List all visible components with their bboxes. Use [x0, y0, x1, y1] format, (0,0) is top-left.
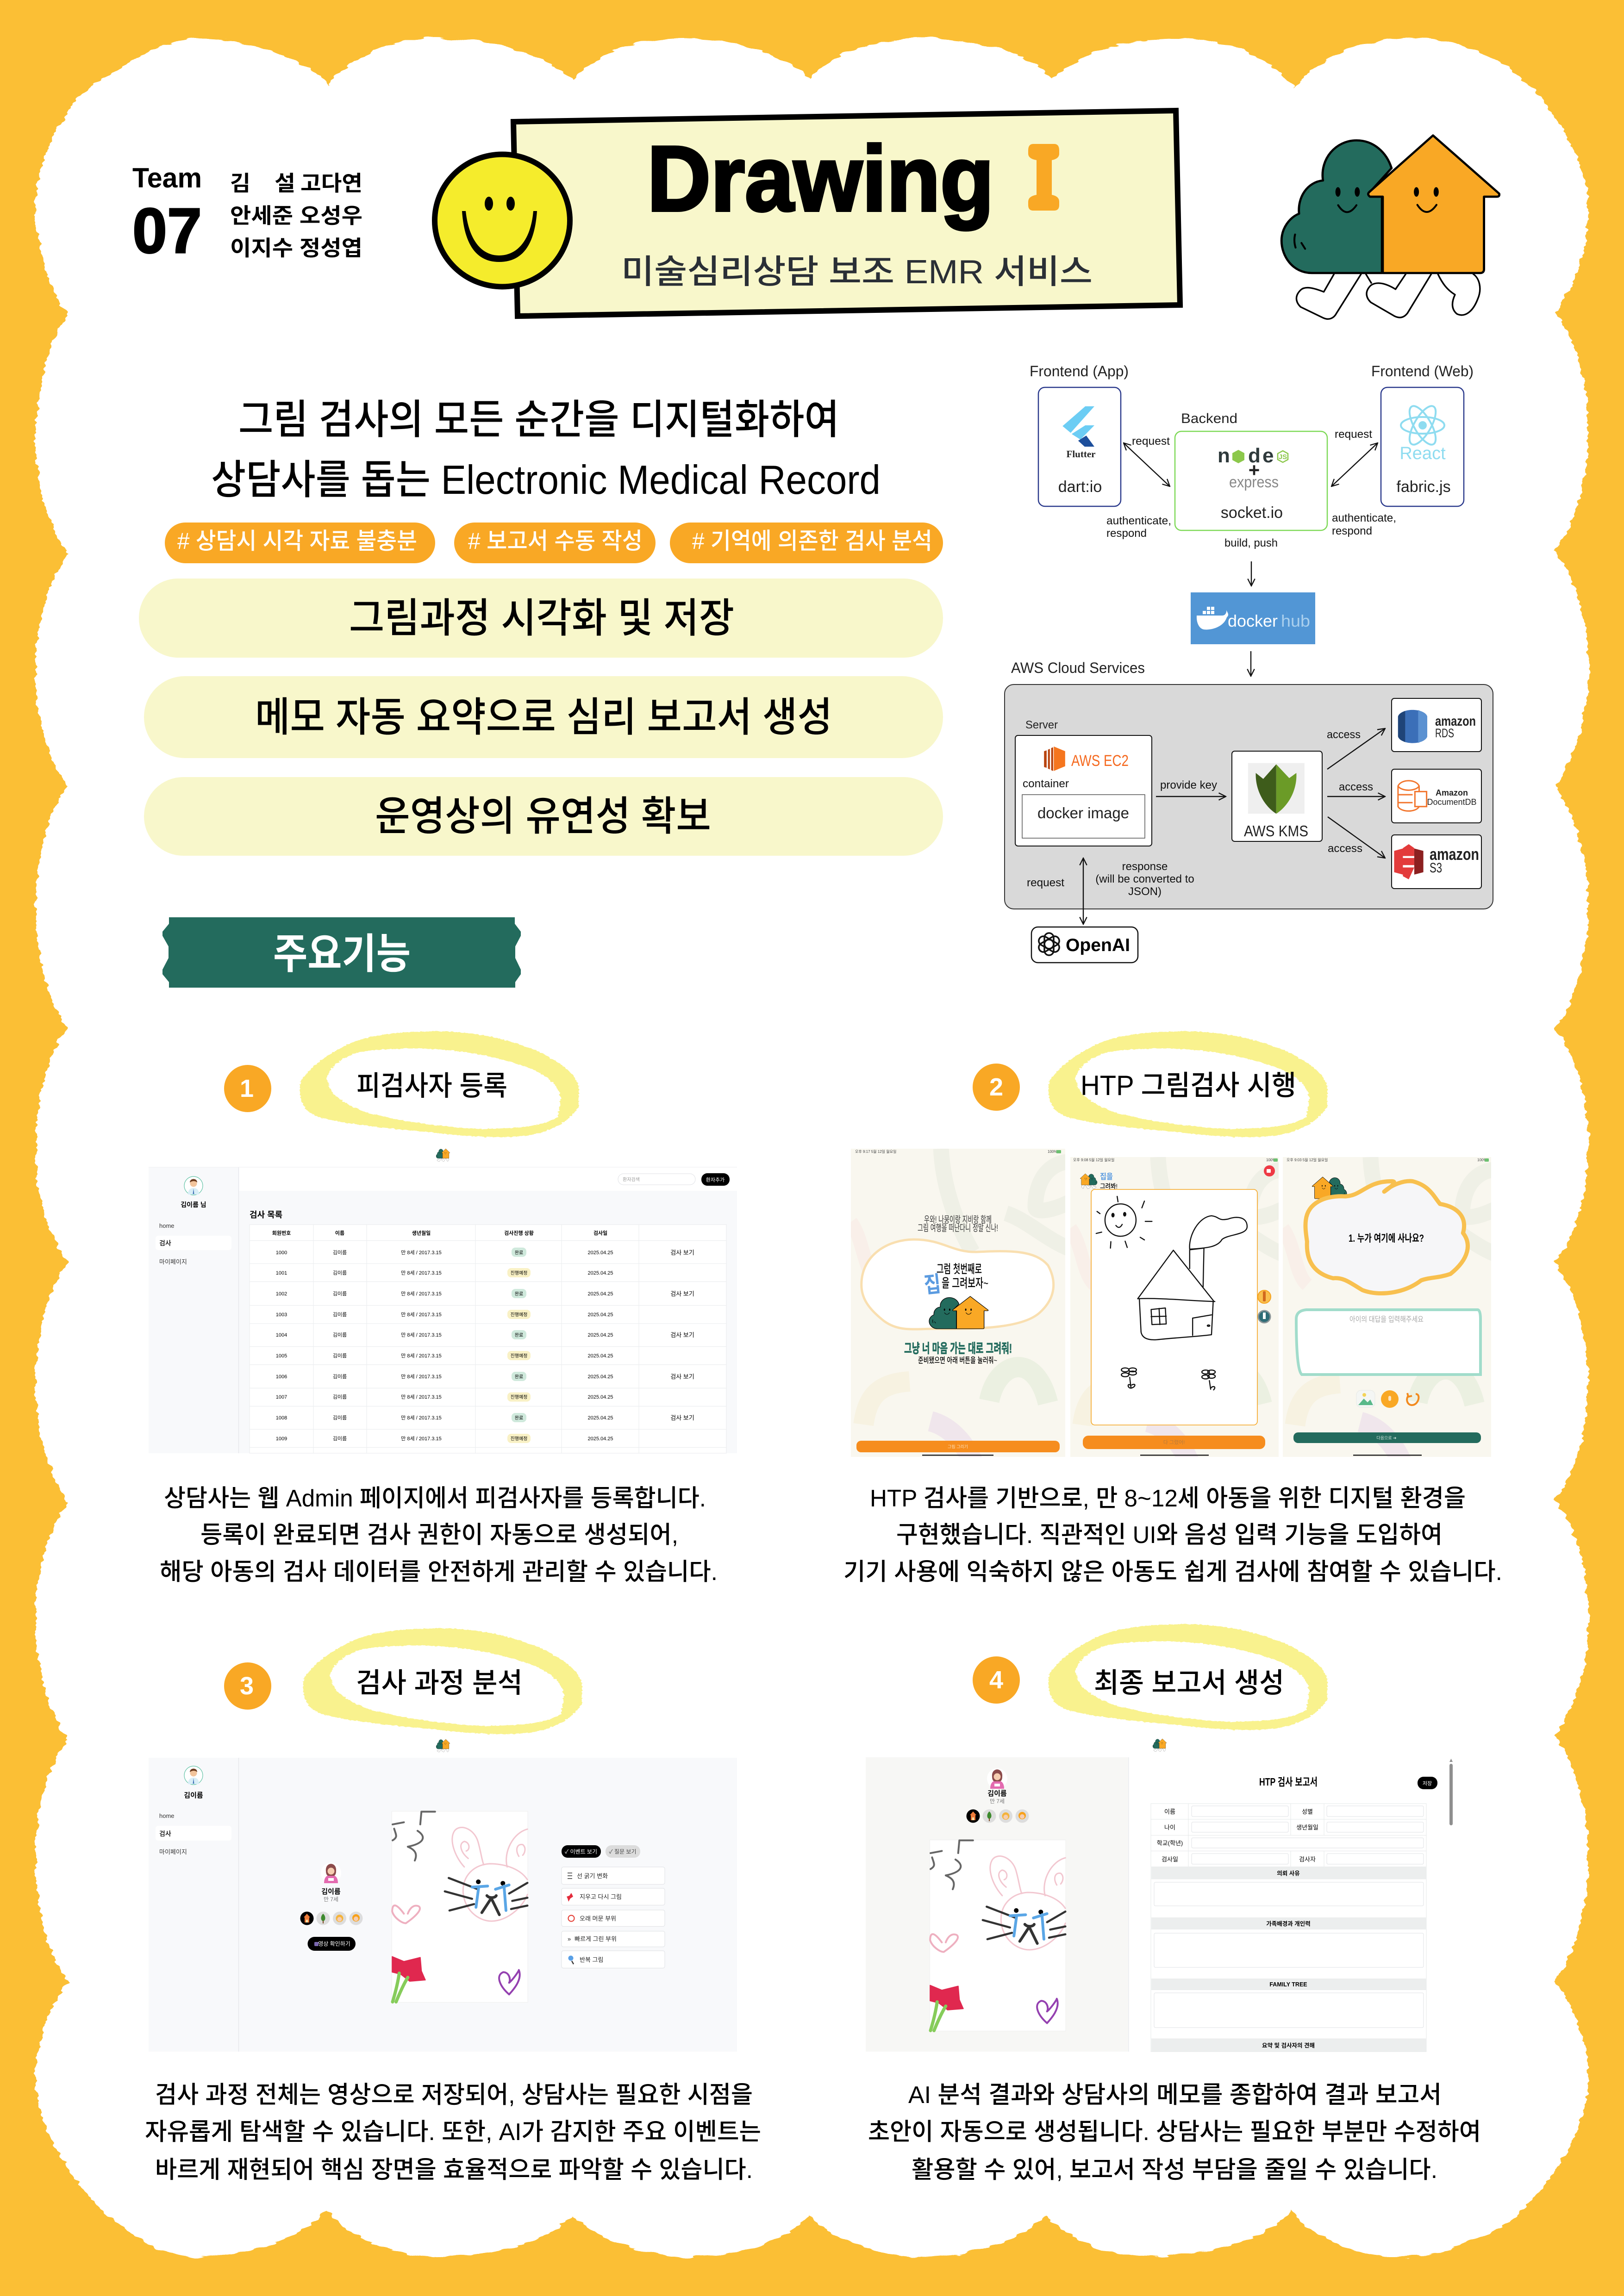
- panel: node backend: e: [1262, 444, 1274, 467]
- panel: aws cloud: JSON): [1128, 885, 1162, 898]
- panel: dart app: Flutter: [1067, 448, 1095, 460]
- report form: 성별: [1302, 1808, 1313, 1815]
- screenshot: drawing analysis: home: [159, 1812, 175, 1819]
- heading: 주요기능 ribbon: 주요기능: [273, 931, 411, 977]
- panel: ec2 server: AWS EC2: [1071, 752, 1129, 770]
- screenshot: drawing analysis: 만 7세: [324, 1896, 338, 1903]
- icon: cloud and house mascots: [1281, 136, 1499, 319]
- voice input icons: [1356, 1390, 1418, 1408]
- screenshot: tablet phone 1: 오후 9:17 5월 12일 월요일: [855, 1149, 896, 1154]
- table: 생년월일: [412, 1230, 431, 1236]
- text: feature 1 description: 해당 아동의 검사 데이터를 안전하게 관리할 수 있습니다.: [160, 1559, 718, 1586]
- panel: amazon documentdb: [1392, 769, 1481, 823]
- hashtag chips: # 상담시 시각 자료 불충분: [177, 528, 417, 554]
- screenshot: tablet phone 2: 집을: [1100, 1172, 1113, 1181]
- arrow: kms to documentdb: [1327, 796, 1385, 797]
- team block: 김: [230, 171, 250, 195]
- screenshot: tablet phone 1: 그럼 첫번째로: [937, 1262, 982, 1276]
- panel: aws cloud: Server: [1025, 719, 1058, 731]
- screenshot: report editor: 저장: [1423, 1780, 1432, 1786]
- toggle buttons: ✓ 질문 보기: [609, 1848, 637, 1855]
- feature pills: 메모 자동 요약으로 심리 보고서 생성: [255, 694, 832, 740]
- feature 4 heading: 4: [989, 1666, 1003, 1694]
- openai badge: [1031, 927, 1138, 963]
- text: feature 3 description: 바르게 재현되어 핵심 장면을 효율적으로 파악할 수 있습니다.: [155, 2157, 753, 2184]
- screenshot: report editor: [866, 1739, 1453, 2052]
- architecture diagram: Frontend (Web): [1371, 363, 1474, 380]
- panel: amazon s3: amazon: [1430, 845, 1479, 864]
- panel: amazon rds: [1392, 698, 1481, 752]
- team block: 안세준 오성우: [230, 204, 362, 228]
- architecture diagram: respond: [1106, 527, 1147, 540]
- table: 2025.04.25: [587, 1291, 613, 1297]
- text: feature 4 description: 활용할 수 있어, 보고서 작성 부담을 줄일 수 있습니다.: [912, 2157, 1437, 2184]
- panel: aws cloud: (will be converted to: [1095, 873, 1194, 885]
- architecture diagram: AWS Cloud Services: [1011, 660, 1145, 676]
- table: 2025.04.25: [587, 1394, 613, 1400]
- openai badge: OpenAI: [1066, 935, 1130, 955]
- table: 김이름: [333, 1250, 347, 1256]
- team block: Team: [132, 162, 202, 193]
- panel: amazon rds: amazon: [1435, 714, 1476, 729]
- architecture diagram: Backend: [1181, 411, 1237, 426]
- table: 진행예정: [511, 1436, 527, 1442]
- table: 진행예정: [511, 1394, 527, 1400]
- screenshot: patient table: home: [159, 1222, 175, 1229]
- table: 완료: [515, 1415, 523, 1421]
- panel: ec2 server: docker image: [1037, 804, 1129, 821]
- toggle buttons: ✓ 이벤트 보기: [565, 1848, 597, 1855]
- screenshot: tablet phone 3: [1283, 1157, 1499, 1471]
- screenshot: tablet phone 1: 그림 여행을 떠난다니 정말 신나!: [918, 1223, 998, 1233]
- arrow: kms to s3: [1328, 817, 1385, 858]
- table: 김이름: [333, 1374, 347, 1380]
- architecture diagram: authenticate,: [1106, 515, 1171, 527]
- screenshot: tablet phone 1: 을 그려보자~: [942, 1276, 988, 1290]
- table: 만 8세 / 2017.3.15: [401, 1436, 442, 1442]
- table: 진행예정: [511, 1353, 527, 1359]
- team block: 고다연: [300, 171, 362, 195]
- event list: 오래 머문 부위: [580, 1915, 616, 1922]
- table: 만 8세 / 2017.3.15: [401, 1250, 442, 1256]
- table: 만 8세 / 2017.3.15: [401, 1270, 442, 1276]
- table: 이름: [335, 1230, 344, 1236]
- team block: 07: [132, 195, 202, 267]
- table: 검사 보기: [670, 1332, 694, 1338]
- table: 1007: [276, 1394, 287, 1400]
- screenshot: tablet phone 2: 다 그렸어!: [1163, 1439, 1185, 1445]
- table: 만 8세 / 2017.3.15: [401, 1394, 442, 1400]
- report form: 생년월일: [1296, 1824, 1318, 1831]
- screenshot: patient table: [149, 1149, 737, 1453]
- panel: aws cloud: [1005, 684, 1493, 909]
- report form: 가족배경과 개인력: [1266, 1920, 1311, 1927]
- table: 검사일: [593, 1230, 607, 1236]
- architecture diagram: build, push: [1224, 537, 1278, 549]
- screenshot: tablet phone 1: 100%: [1048, 1150, 1057, 1154]
- screenshot: drawing analysis: 김이름: [321, 1888, 341, 1896]
- panel: ec2 server: container: [1023, 778, 1069, 790]
- report form: FAMILY TREE: [1269, 1981, 1307, 1988]
- screenshot: report editor: HTP 검사 보고서: [1259, 1776, 1318, 1788]
- arrow: app to backend: [1124, 443, 1170, 486]
- docker hub badge: [1191, 592, 1315, 644]
- text: feature 1 description: 상담사는 웹 Admin 페이지에서 피검사자를 등록합니다.: [164, 1485, 706, 1512]
- hero text: [211, 397, 881, 503]
- hero text: 그림 검사의 모든 순간을 디지털화하여: [238, 397, 839, 442]
- feature 2 heading: HTP 그림검사 시행: [1081, 1070, 1296, 1101]
- cloud question bubble: [1305, 1181, 1468, 1294]
- table: 2025.04.25: [587, 1250, 613, 1256]
- table: 1001: [276, 1270, 287, 1276]
- screenshot: patient table: 검사: [159, 1239, 171, 1247]
- hashtag chips: # 기억에 의존한 검사 분석: [692, 528, 932, 554]
- icon: mini logo: [436, 1739, 450, 1752]
- screenshot: tablet phone 2: [1070, 1157, 1287, 1471]
- panel: amazon documentdb: DocumentDB: [1427, 797, 1477, 807]
- panel: ec2 server: [1015, 735, 1152, 846]
- panel: aws cloud: request: [1027, 877, 1064, 889]
- feature 1 heading: 1: [240, 1075, 254, 1102]
- report form: 요약 및 검사자의 견해: [1262, 2042, 1315, 2049]
- screenshot: drawing analysis: [149, 1739, 737, 2052]
- table: 2025.04.25: [587, 1312, 613, 1318]
- text: feature 1 description: 등록이 완료되면 검사 권한이 자동으로 생성되어,: [200, 1522, 678, 1549]
- panel: react web: React: [1399, 444, 1446, 463]
- table: 1006: [276, 1374, 287, 1380]
- screenshot: tablet phone 2: 100%: [1266, 1158, 1275, 1162]
- text: feature 4 description: 초안이 자동으로 생성됩니다. 상담사는 필요한 부분만 수정하여: [868, 2119, 1481, 2146]
- heading: 주요기능 ribbon: [162, 917, 521, 988]
- screenshot: drawing analysis: 검사: [159, 1830, 171, 1837]
- panel: node backend: +: [1249, 459, 1260, 481]
- report form: 검사일: [1162, 1856, 1178, 1863]
- table: 회원번호: [272, 1230, 291, 1236]
- screenshot: tablet phone 1: 그냥 너 마음 가는 대로 그려줘!: [904, 1341, 1012, 1356]
- feature 3 heading: 3: [240, 1672, 254, 1700]
- screenshot: tablet phone 3: 아이의 대답을 입력해주세요: [1349, 1315, 1424, 1324]
- panel: aws cloud: access: [1339, 781, 1373, 793]
- screenshot: tablet phone 1: 우와! 나뭉이랑 지비랑 함께: [924, 1214, 992, 1225]
- child's house drawing: [1096, 1196, 1247, 1390]
- table: 1004: [276, 1332, 287, 1338]
- report form: 검사자: [1299, 1856, 1316, 1863]
- screenshot: tablet phone 1: [851, 1149, 1073, 1472]
- panel: amazon rds: RDS: [1435, 726, 1454, 740]
- text: feature 4 description: [868, 2082, 1481, 2184]
- panel: aws kms: [1232, 751, 1322, 841]
- table: 검사 보기: [670, 1290, 694, 1297]
- toggle buttons: [562, 1845, 640, 1858]
- text: feature 2 description: 구현했습니다. 직관적인 UI와 음성 입력 기능을 도입하여: [896, 1522, 1443, 1549]
- table: 2025.04.25: [587, 1353, 613, 1359]
- table: 1002: [276, 1291, 287, 1297]
- docker hub badge: hub: [1281, 611, 1310, 630]
- table: 진행예정: [511, 1270, 527, 1276]
- feature pills: 운영상의 유연성 확보: [375, 793, 711, 839]
- icon: smiley: [435, 155, 570, 287]
- team block: [132, 162, 362, 267]
- title card: [513, 111, 1180, 316]
- docker hub badge: docker: [1228, 611, 1278, 630]
- panel: aws cloud: response: [1122, 860, 1168, 873]
- panel: node backend: n: [1218, 444, 1230, 467]
- panel: aws cloud: provide key: [1160, 779, 1217, 791]
- screenshot: drawing analysis: 영상 확인하기: [318, 1941, 350, 1947]
- panel: node backend: d: [1248, 444, 1261, 467]
- table: 김이름: [333, 1436, 347, 1442]
- panel: aws cloud: access: [1327, 728, 1361, 741]
- report form: 나이: [1164, 1824, 1175, 1831]
- text: feature 4 description: AI 분석 결과와 상담사의 메모를 종합하여 결과 보고서: [908, 2082, 1442, 2109]
- text: feature 2 description: [843, 1485, 1502, 1586]
- table: 김이름: [333, 1270, 347, 1276]
- architecture diagram: request: [1132, 435, 1170, 448]
- event list: »: [568, 1935, 571, 1942]
- feature 1 heading: [224, 1031, 579, 1137]
- event list: 선 굵기 변화: [577, 1873, 608, 1879]
- table: 완료: [515, 1374, 523, 1380]
- screenshot: tablet phone 3: 100%: [1477, 1158, 1487, 1162]
- architecture diagram: respond: [1332, 525, 1372, 537]
- feature 4 heading: [973, 1624, 1328, 1730]
- report form: 학교(학년): [1157, 1840, 1183, 1847]
- feature 4 heading: 최종 보고서 생성: [1094, 1668, 1284, 1699]
- event list: 반복 그림: [580, 1956, 603, 1963]
- screenshot: report editor: 만 7세: [990, 1798, 1005, 1804]
- table: 2025.04.25: [587, 1374, 613, 1380]
- panel: node backend: JS: [1279, 453, 1287, 461]
- scrollbar: [1449, 1759, 1453, 1825]
- table: 김이름: [333, 1353, 347, 1359]
- table: 진행예정: [511, 1312, 527, 1318]
- screenshot: tablet phone 3: 오후 9:03 5월 12일 월요일: [1287, 1157, 1328, 1162]
- screenshot: patient table: 환자검색: [623, 1177, 640, 1182]
- feature 2 heading: 2: [989, 1073, 1003, 1101]
- table: 검사 보기: [670, 1414, 694, 1421]
- table: 1005: [276, 1353, 287, 1359]
- architecture diagram: authenticate,: [1332, 512, 1396, 524]
- child's rabbit drawing: [392, 1811, 528, 2002]
- arrow: ec2 to openai: [1083, 858, 1084, 924]
- feature pills: 그림과정 시각화 및 저장: [349, 595, 734, 641]
- text: feature 3 description: 검사 과정 전체는 영상으로 저장되어, 상담사는 필요한 시점을: [155, 2082, 753, 2109]
- table: 완료: [515, 1291, 523, 1297]
- team block: 이지수 정성엽: [230, 236, 362, 260]
- feature 3 heading: [224, 1628, 582, 1734]
- screenshot: patient table: 마이페이지: [159, 1258, 187, 1265]
- panel: aws kms: AWS KMS: [1244, 822, 1308, 840]
- screenshot: tablet phone 3: 다음으로 ➜: [1376, 1436, 1397, 1440]
- text: feature 3 description: [145, 2082, 761, 2184]
- architecture diagram: request: [1335, 428, 1372, 441]
- event list: 지우고 다시 그림: [580, 1893, 622, 1900]
- table: 만 8세 / 2017.3.15: [401, 1312, 442, 1318]
- architecture diagram: Frontend (App): [1030, 363, 1129, 380]
- screenshot: drawing analysis: 김이름: [184, 1792, 203, 1799]
- report form: [1151, 1804, 1426, 2052]
- table: 검사 보기: [670, 1373, 694, 1380]
- feature 1 heading: 피검사자 등록: [356, 1070, 507, 1101]
- arrow: ec2 to kms: [1156, 796, 1226, 797]
- table: 검사 보기: [670, 1249, 694, 1256]
- table: 2025.04.25: [587, 1415, 613, 1421]
- screenshot: report editor: 김이름: [987, 1790, 1007, 1798]
- table: 만 8세 / 2017.3.15: [401, 1332, 442, 1338]
- screenshot: tablet phone 2: 그려봐!: [1100, 1182, 1118, 1190]
- text: feature 2 description: HTP 검사를 기반으로, 만 8~12세 아동을 위한 디지털 환경을: [870, 1485, 1466, 1512]
- bubble blob: [862, 1239, 1054, 1329]
- team block: 설: [275, 171, 295, 195]
- screenshot: tablet phone 1: 그림 그리기: [948, 1444, 968, 1449]
- panel: node backend: socket.io: [1221, 504, 1283, 522]
- panel: amazon s3: [1392, 835, 1481, 889]
- feature 3 heading: 검사 과정 분석: [356, 1668, 523, 1699]
- panel: node backend: express: [1229, 473, 1279, 491]
- panel: amazon documentdb: Amazon: [1436, 788, 1468, 797]
- child's rabbit drawing: [930, 1840, 1066, 2031]
- answer box: [1296, 1310, 1480, 1375]
- arrow: web to backend: [1331, 443, 1378, 486]
- hero text: 상담사를 돕는 Electronic Medical Record: [211, 457, 881, 503]
- screenshot: tablet phone 2: 오후 9:08 5월 12일 월요일: [1073, 1157, 1114, 1162]
- table: 1003: [276, 1312, 287, 1318]
- table: 김이름: [333, 1332, 347, 1338]
- table: 김이름: [333, 1291, 347, 1297]
- table: 김이름: [333, 1312, 347, 1318]
- panel: react web: fabric.js: [1396, 478, 1451, 496]
- report form: 의뢰 사유: [1277, 1870, 1300, 1877]
- table: 김이름: [333, 1394, 347, 1400]
- hashtag chips: [165, 523, 943, 563]
- table: 1009: [276, 1436, 287, 1442]
- arrow: kms to rds: [1327, 728, 1385, 769]
- screenshot: tablet phone 1: 준비됐으면 아래 버튼을 눌러줘~: [918, 1356, 997, 1365]
- table: 2025.04.25: [587, 1436, 613, 1442]
- screenshot: tablet phone 1: 집: [923, 1272, 942, 1298]
- table: 완료: [515, 1250, 523, 1256]
- table: 2025.04.25: [587, 1332, 613, 1338]
- table: 완료: [515, 1332, 523, 1338]
- table: 만 8세 / 2017.3.15: [401, 1353, 442, 1359]
- screenshot: patient table: 검사 목록: [250, 1210, 282, 1220]
- table: [250, 1225, 726, 1453]
- feature pills: [139, 579, 943, 856]
- table: 김이름: [333, 1415, 347, 1421]
- screenshot: tablet phone 3: 1. 누가 여기에 사나요?: [1349, 1232, 1424, 1244]
- report form: 이름: [1164, 1808, 1175, 1815]
- architecture diagram: [1005, 363, 1493, 963]
- arrow: docker hub to aws: [1250, 651, 1251, 676]
- text: feature 1 description: [160, 1485, 718, 1586]
- table: 1008: [276, 1415, 287, 1421]
- panel: dart app: dart:io: [1058, 478, 1102, 496]
- table: 2025.04.25: [587, 1270, 613, 1276]
- table: 만 8세 / 2017.3.15: [401, 1415, 442, 1421]
- panel: dart app: [1038, 387, 1121, 506]
- text: feature 3 description: 자유롭게 탐색할 수 있습니다. 또한, AI가 감지한 주요 이벤트는: [145, 2119, 761, 2146]
- table: 검사진행 상황: [504, 1230, 534, 1236]
- screenshot: patient table: 김이름 님: [181, 1201, 206, 1208]
- text: feature 2 description: 기기 사용에 익숙하지 않은 아동도 쉽게 검사에 참여할 수 있습니다.: [843, 1559, 1502, 1586]
- icon: mini logo: [436, 1149, 450, 1162]
- table: 만 8세 / 2017.3.15: [401, 1291, 442, 1297]
- title card: 미술심리상담 보조 EMR 서비스: [621, 254, 1093, 291]
- screenshot: patient table: 환자추가: [706, 1177, 725, 1183]
- screenshot: drawing analysis: 마이페이지: [159, 1848, 187, 1855]
- feature 2 heading: [973, 1031, 1328, 1137]
- arrow: backend to docker hub: [1251, 561, 1252, 586]
- title card: Drawing: [647, 127, 994, 230]
- event list: 빠르게 그린 부위: [575, 1935, 617, 1942]
- table: 만 8세 / 2017.3.15: [401, 1374, 442, 1380]
- tool buttons: [1258, 1290, 1271, 1323]
- panel: amazon s3: S3: [1430, 860, 1442, 876]
- icon: mini logo: [1153, 1739, 1167, 1752]
- panel: aws cloud: access: [1328, 842, 1362, 855]
- panel: node backend: [1175, 431, 1327, 530]
- hashtag chips: # 보고서 수동 작성: [468, 528, 643, 554]
- event list: [562, 1867, 665, 1968]
- table: 1000: [276, 1250, 287, 1256]
- panel: react web: [1381, 387, 1464, 506]
